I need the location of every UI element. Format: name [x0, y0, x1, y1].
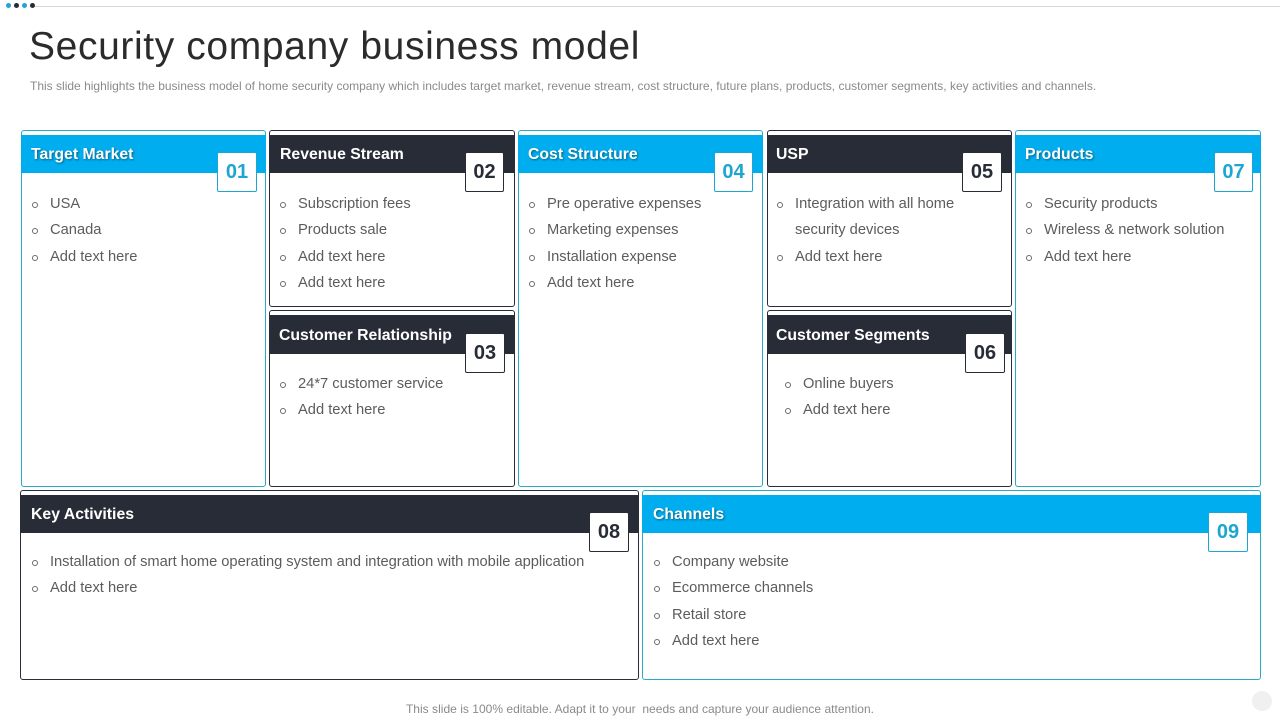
- badge 04: 04: [722, 161, 745, 183]
- page indicator circle: [1252, 691, 1272, 711]
- list: channels: Retail store: [672, 606, 746, 622]
- list: channels: Company website: [672, 554, 789, 570]
- heading: cost structure: Cost Structure: [528, 146, 638, 163]
- header: USP: [767, 135, 1012, 173]
- list: channels: Add text here: [672, 632, 759, 648]
- list: cost structure: Marketing expenses: [547, 222, 678, 238]
- list: target market: USA: [50, 196, 80, 212]
- list: key activities: Add text here: [50, 580, 137, 596]
- heading: target market: Target Market: [31, 146, 133, 163]
- header: target market: [21, 135, 266, 173]
- list: USP: Integration with all home: [795, 196, 954, 212]
- badge 06: 06: [974, 342, 996, 364]
- list: key activities: [32, 554, 584, 596]
- list: products: Security products: [1044, 196, 1157, 212]
- badge 08: 08: [598, 521, 620, 543]
- heading: channels: Channels: [653, 506, 724, 523]
- panel: target market: [21, 130, 266, 487]
- list: customer relationship: [280, 376, 443, 418]
- list: revenue stream: [280, 196, 411, 290]
- heading: customer segments: Customer Segments: [776, 327, 930, 344]
- list: revenue stream: Add text here: [298, 248, 385, 264]
- list: channels: Ecommerce channels: [672, 580, 813, 596]
- list: products: Add text here: [1044, 248, 1131, 264]
- list: customer segments: [785, 376, 894, 418]
- list: revenue stream: Add text here: [298, 274, 385, 290]
- title: Security company business model: [29, 25, 640, 68]
- badge 01: 01: [226, 161, 248, 183]
- panel: key activities: [20, 490, 639, 680]
- list: USP: security devices: [795, 222, 899, 238]
- list: USP: [777, 196, 954, 264]
- panel: revenue stream: [269, 130, 515, 307]
- badge 04: [714, 152, 753, 192]
- badge 03: [465, 333, 505, 373]
- badge 02: [465, 152, 504, 192]
- list: cost structure: Installation expense: [547, 248, 677, 264]
- panel: customer segments: [767, 310, 1012, 487]
- badge 03: 03: [474, 342, 496, 364]
- list: customer relationship: Add text here: [298, 402, 385, 418]
- footer note: This slide is 100% editable. Adapt it to your needs and capture your audience attention.: [406, 702, 874, 716]
- list: customer relationship: 24*7 customer service: [298, 376, 443, 392]
- badge 06: [965, 333, 1005, 373]
- list: target market: Add text here: [50, 248, 137, 264]
- list: customer segments: Add text here: [803, 402, 890, 418]
- panel: channels: [642, 490, 1261, 680]
- heading: products: Products: [1025, 146, 1093, 163]
- panel: customer relationship: [269, 310, 515, 487]
- heading: customer relationship: Customer Relationship: [279, 327, 452, 344]
- list: revenue stream: Products sale: [298, 222, 387, 238]
- panel: USP: [767, 130, 1012, 307]
- list: cost structure: Pre operative expenses: [547, 196, 701, 212]
- badge 08: [589, 512, 629, 552]
- header: revenue stream: [269, 135, 515, 173]
- badge 09: 09: [1217, 521, 1239, 543]
- badge 01: [217, 152, 257, 192]
- list: target market: Canada: [50, 222, 101, 238]
- list: USP: Add text here: [795, 248, 882, 264]
- heading: revenue stream: Revenue Stream: [280, 146, 404, 163]
- badge 07: [1214, 152, 1253, 192]
- list: products: [1026, 196, 1224, 264]
- list: target market: [32, 196, 137, 264]
- list: revenue stream: Subscription fees: [298, 196, 411, 212]
- badge 07: 07: [1222, 161, 1245, 183]
- list: customer segments: Online buyers: [803, 376, 894, 392]
- badge 02: 02: [473, 161, 496, 183]
- header: customer segments: [767, 315, 1012, 354]
- list: key activities: Installation of smart home operating system and integration with mobile application: [50, 554, 584, 570]
- badge 05: [962, 152, 1002, 192]
- header: customer relationship: [269, 315, 515, 354]
- header: cost structure: [518, 135, 763, 173]
- header: key activities: [20, 495, 639, 533]
- header: channels: [642, 495, 1261, 533]
- heading: key activities: Key Activities: [31, 506, 134, 523]
- badge 05: 05: [971, 161, 993, 183]
- top decoration: [6, 3, 1280, 8]
- subtitle: This slide highlights the business model of home security company which includes target market, revenue stream, cost structure, future plans, products, customer segments, key activities and channels.: [30, 79, 1096, 93]
- list: channels: [654, 554, 813, 648]
- panel: products: [1015, 130, 1261, 487]
- panel: cost structure: [518, 130, 763, 487]
- list: products: Wireless & network solution: [1044, 222, 1224, 238]
- list: cost structure: [529, 196, 701, 290]
- badge 09: [1208, 512, 1248, 552]
- heading: USP: USP: [776, 146, 808, 163]
- header: products: [1015, 135, 1261, 173]
- list: cost structure: Add text here: [547, 274, 634, 290]
